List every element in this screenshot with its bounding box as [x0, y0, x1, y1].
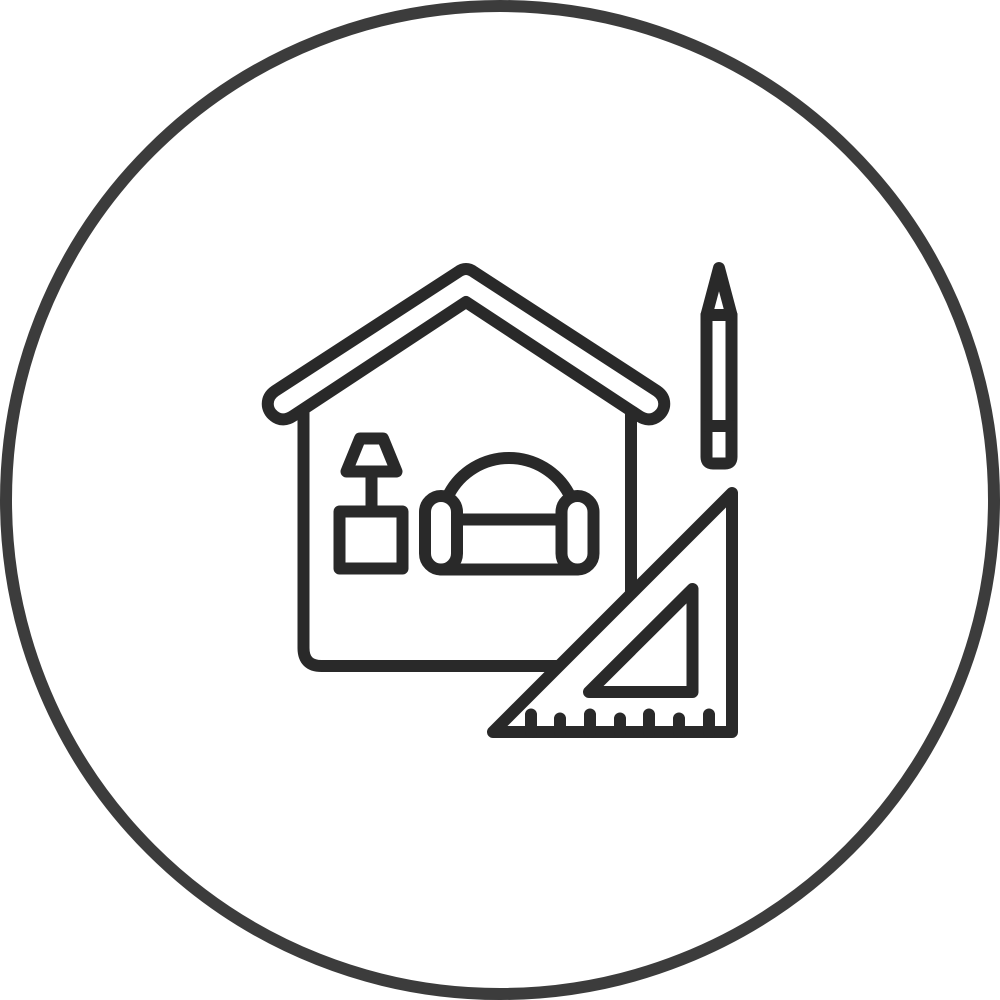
lamp stem	[366, 472, 378, 511]
pencil body	[706, 268, 732, 464]
icon: house	[268, 269, 664, 666]
outer triangle	[493, 493, 732, 732]
lamp shade	[346, 438, 396, 472]
sofa back	[449, 458, 569, 494]
roof	[268, 269, 664, 419]
icon: pencil	[706, 268, 732, 464]
right arm	[562, 496, 594, 570]
icon: sofa	[425, 458, 594, 570]
inner triangle	[589, 589, 692, 692]
seat	[441, 520, 577, 570]
icon: set square	[493, 493, 732, 732]
icon: lamp and side table	[340, 438, 402, 568]
side table	[340, 512, 402, 568]
left arm	[425, 496, 457, 570]
ruler ticks	[531, 714, 709, 732]
house walls	[304, 411, 556, 666]
pencil details	[706, 315, 732, 426]
